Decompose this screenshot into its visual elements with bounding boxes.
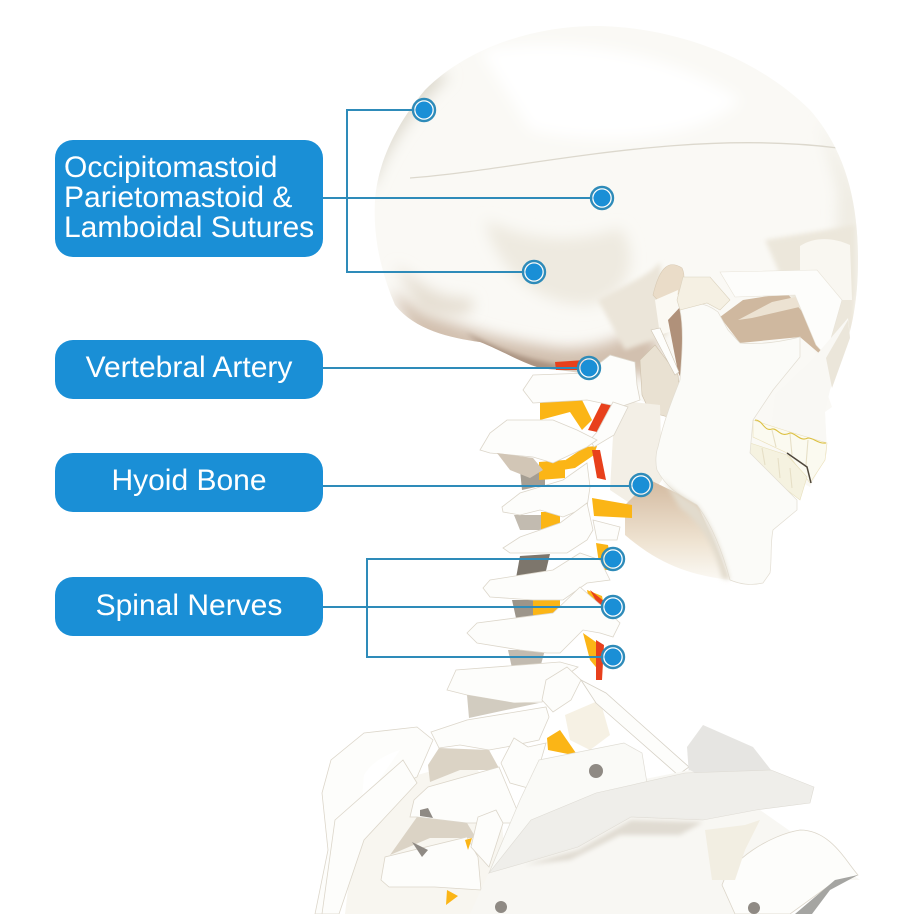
label: sutures: Occipitomastoid bbox=[64, 151, 277, 184]
C7 underside bbox=[467, 695, 539, 718]
label: sutures: Lamboidal Sutures bbox=[64, 211, 314, 244]
yellow nerve roots bbox=[540, 400, 592, 430]
C1 atlas bbox=[523, 355, 640, 407]
mandible bbox=[656, 303, 800, 584]
teeth bbox=[750, 420, 827, 500]
red arteries bbox=[555, 360, 612, 382]
label: vertebral artery: Vertebral Artery bbox=[86, 351, 292, 384]
label: sutures: Parietomastoid & bbox=[64, 181, 292, 214]
C4 right piece bbox=[593, 520, 620, 540]
connector lines bbox=[323, 110, 641, 657]
label: spinal nerves: Spinal Nerves bbox=[96, 589, 282, 622]
C2 bbox=[480, 420, 597, 463]
C2 under shadow bbox=[497, 453, 543, 478]
marker: upper suture bbox=[413, 99, 435, 121]
label: vertebral artery bbox=[55, 340, 323, 399]
ear region and styloid bbox=[640, 265, 684, 417]
C3 bbox=[502, 463, 590, 517]
region behind neck under skull bbox=[610, 400, 662, 510]
thoracic spine and left ribs bbox=[315, 667, 610, 914]
marker: spinal nerve lower bbox=[602, 646, 624, 668]
diagonal rib bbox=[581, 680, 689, 775]
marker: vertebral artery bbox=[578, 357, 600, 379]
C1 right process bbox=[590, 402, 628, 447]
marker: spinal nerve upper bbox=[602, 548, 624, 570]
label: hyoid bone: Hyoid Bone bbox=[111, 464, 267, 497]
skeleton model: skull, cervical spine and shoulder bbox=[315, 26, 862, 914]
marker: lower suture bbox=[523, 261, 545, 283]
marker: hyoid bone bbox=[630, 474, 652, 496]
marker: middle suture bbox=[591, 187, 613, 209]
marker: spinal nerve middle bbox=[602, 596, 624, 618]
label: spinal nerves bbox=[55, 577, 323, 636]
scapula and acromion bbox=[470, 725, 860, 914]
C6 bbox=[467, 587, 620, 653]
C5 bbox=[483, 553, 610, 600]
shadow between vertebrae bbox=[520, 470, 545, 490]
zygomatic arch and temporal cavity bbox=[720, 270, 850, 487]
C7 bbox=[447, 662, 578, 703]
label: sutures bbox=[55, 140, 323, 257]
cervical vertebrae with nerves and artery bbox=[447, 355, 640, 718]
C4 bbox=[503, 503, 593, 553]
label: hyoid bone bbox=[55, 453, 323, 512]
skull cranium bbox=[362, 26, 862, 487]
mandible lower inner shadow bbox=[625, 480, 730, 580]
condyle bbox=[677, 277, 730, 310]
